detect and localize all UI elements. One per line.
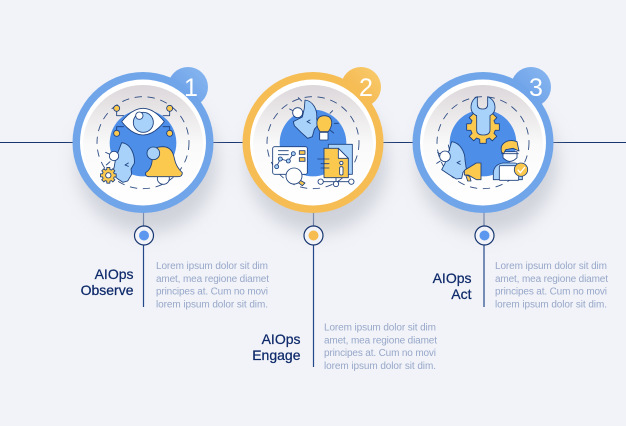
text block 2: principes at. Cum no movi bbox=[324, 348, 436, 359]
icon: act bbox=[437, 97, 529, 189]
heading: AIOps Act: Act bbox=[451, 286, 472, 302]
badge 2 bbox=[341, 67, 381, 107]
text block 3: Lorem ipsum dolor sit dim bbox=[495, 261, 607, 272]
text block 1: lorem ipsum dolor sit dim. bbox=[156, 299, 268, 310]
badge 3 bbox=[511, 67, 551, 107]
step 3 group bbox=[412, 67, 557, 307]
icon: engage bbox=[267, 97, 359, 189]
text block 2: amet, mea regione diamet bbox=[324, 335, 437, 346]
text block 1: amet, mea regione diamet bbox=[156, 274, 269, 285]
text block 1: Lorem ipsum dolor sit dim bbox=[156, 261, 268, 272]
heading: AIOps Observe: Observe bbox=[81, 282, 134, 298]
badge 1 number: 1 bbox=[184, 74, 198, 102]
heading: AIOps Act: AIOps bbox=[433, 270, 472, 286]
ring 1 bbox=[72, 72, 214, 213]
ring 2 bbox=[242, 72, 384, 213]
heading: AIOps Engage: AIOps bbox=[262, 331, 300, 347]
circle 2 shadow bbox=[247, 93, 387, 233]
text block 3: lorem ipsum dolor sit dim. bbox=[495, 299, 607, 310]
step 1 group bbox=[72, 67, 217, 307]
connector line 3 bbox=[483, 205, 485, 307]
node 1 bbox=[134, 226, 154, 245]
node 3 bbox=[475, 226, 494, 245]
circle 3 shadow bbox=[417, 93, 557, 233]
heading: AIOps Observe: AIOps bbox=[95, 266, 134, 282]
text block 3: amet, mea regione diamet bbox=[495, 274, 608, 285]
badge 2 number: 2 bbox=[359, 74, 373, 102]
step 2 group bbox=[242, 67, 387, 367]
text block 3: principes at. Cum no movi bbox=[495, 286, 607, 298]
connector line 2 bbox=[312, 205, 314, 367]
heading: AIOps Engage: Engage bbox=[252, 347, 301, 363]
node 2 bbox=[304, 226, 323, 245]
text block 1: principes at. Cum no movi bbox=[156, 286, 268, 298]
badge 1 bbox=[168, 67, 208, 107]
circle 1 shadow bbox=[77, 93, 217, 233]
text block 2: Lorem ipsum dolor sit dim bbox=[324, 322, 436, 334]
badge 3 number: 3 bbox=[529, 74, 543, 102]
horizontal timeline bbox=[0, 142, 626, 144]
ring 3 bbox=[412, 72, 554, 213]
text block 2: lorem ipsum dolor sit dim. bbox=[324, 361, 436, 372]
icon: observe bbox=[97, 97, 189, 189]
connector line 1 bbox=[142, 205, 144, 307]
